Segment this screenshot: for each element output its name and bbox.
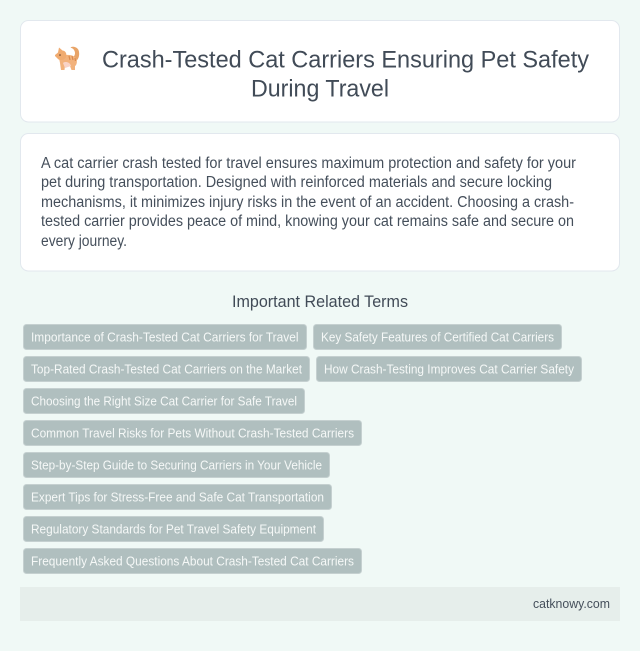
title text <box>102 46 590 102</box>
tag: Top-Rated Crash-Tested Cat Carriers on the Market <box>31 362 302 376</box>
description text: every journey. <box>41 233 127 250</box>
panel: description card <box>20 134 620 271</box>
tag: Choosing the Right Size Cat Carrier for Safe Travel <box>31 394 297 408</box>
tag <box>316 356 582 382</box>
tag: Common Travel Risks for Pets Without Crash-Tested Carriers <box>31 426 354 440</box>
title text: During Travel <box>251 76 389 102</box>
tag <box>24 324 306 350</box>
tag <box>24 356 310 382</box>
tag <box>24 452 330 478</box>
description text: pet during transportation. Designed with reinforced materials and secure locking <box>41 174 552 191</box>
tag <box>24 388 304 414</box>
tag: Frequently Asked Questions About Crash-Tested Cat Carriers <box>31 554 354 568</box>
title text: Crash-Tested Cat Carriers Ensuring Pet Safety <box>102 46 590 74</box>
tag: Key Safety Features of Certified Cat Carriers <box>321 330 554 344</box>
panel: title card <box>20 20 620 122</box>
description text <box>41 155 576 250</box>
tag: Step-by-Step Guide to Securing Carriers in Your Vehicle <box>31 458 322 472</box>
tag <box>314 324 562 350</box>
description text: A cat carrier crash tested for travel ensures maximum protection and safety for your <box>41 155 576 172</box>
tag <box>24 548 362 574</box>
tag: How Crash-Testing Improves Cat Carrier Safety <box>324 362 575 376</box>
tag: Importance of Crash-Tested Cat Carriers for Travel <box>31 330 298 344</box>
description text: mechanisms, it minimizes injury risks in the event of an accident. Choosing a crash- <box>41 194 574 211</box>
heading: important related terms: Important Related Terms <box>232 293 408 311</box>
description text: tested carrier provides peace of mind, knowing your cat remains safe and secure on <box>41 213 574 230</box>
tag list <box>24 324 582 574</box>
icon: cat <box>55 47 79 70</box>
tag: Expert Tips for Stress-Free and Safe Cat Transportation <box>31 490 324 504</box>
tag <box>24 516 324 542</box>
tag: Regulatory Standards for Pet Travel Safety Equipment <box>31 522 316 536</box>
tag <box>24 420 362 446</box>
footer <box>20 587 620 621</box>
tag <box>24 484 332 510</box>
footer: catknowy.com <box>533 597 610 611</box>
